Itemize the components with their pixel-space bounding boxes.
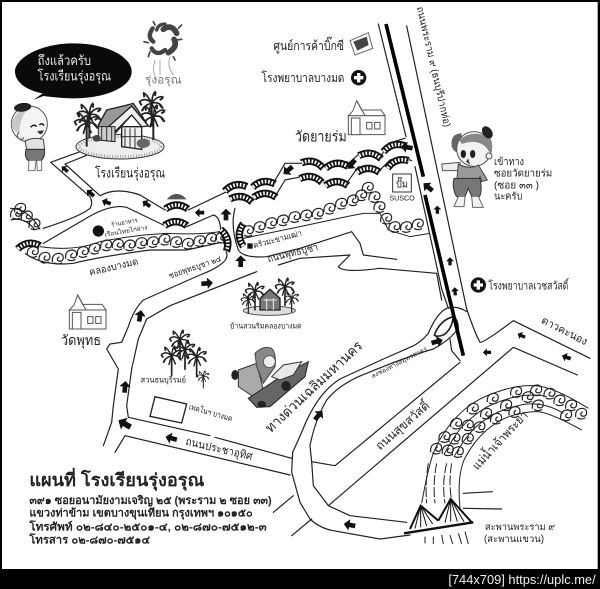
speech bubble: ถึงแล้วครับ [38,53,91,68]
label: Wetchawat hospital: โรงพยาบาลเวชสวัสดิ์ [488,277,570,292]
logo: Rung Aroon sun: รุ่งอรุณ [145,74,182,86]
car illustration [231,347,308,408]
temple: Wat Phut [69,295,106,329]
label: Rama 9 bridge: (สะพานแขวน) [484,534,544,545]
label: Chaloem Maha Nakhon expressway: ทางด่วนเฉลิมมหานคร [262,337,366,436]
label: school name: โรงเรียนรุ่งอรุณ [95,165,165,181]
callout: enter Soi Wat Yai Rom: เข้าทาง [494,156,524,168]
address block [28,494,272,546]
callout: enter Soi Wat Yai Rom: ซอยวัดยายร่ม [494,169,552,180]
highway: Rama 9 road [378,24,467,356]
Chao Phraya river [422,385,588,544]
road network [43,138,590,539]
restaurant marker and label: เรือนไทยไก่ย่าง [104,223,148,239]
label: Big C: ศูนย์การค้าบิ๊กซี [273,36,344,54]
label: to Samut Sakhon: ลงช่องทางสมุทรสาคร [370,346,429,380]
label: Bang Mot hospital: โรงพยาบาลบางมด [262,70,344,85]
bridges [17,142,409,251]
title: map of Rung Aroon School: แผนที่ โรงเรียนรุ่งอรุณ [29,467,204,491]
image-host footer caption: [744x709] https://uplc.me/ [448,573,596,587]
KMUTT Bang Mot campus: เทคโนฯ บางมด [188,401,234,423]
label: Bang Mot canal: คลองบางมด [88,257,139,279]
callout: enter Soi Wat Yai Rom: นะครับ [494,191,522,202]
Rama 9 bridge [404,499,473,533]
label: Rama 9 bridge [484,522,555,545]
expressway loop [467,309,590,358]
label: Suk Sawat road: ถนนสุขสวัสดิ์ [371,396,434,454]
label: Big C [273,33,373,55]
label: Soi Phutthabucha 24: ซอยพุทธบูชา ๒๔ [167,253,223,282]
label: Pracha Uthit road: ถนนประชาอุทิศ [184,436,254,463]
address block: โทรสาร ๐๒-๘๗๐-๗๕๑๔ [28,532,151,546]
character: boy with topknot [11,102,47,171]
SUSCO gas station: ปั๊ม [396,176,408,190]
garden house: riverside homes [241,278,299,315]
school building on island [74,91,165,159]
restaurant marker: Khrua Makham Thao: ครัวมะขามเฒ่า [252,228,303,250]
label: Phutthabucha road: ถนนพุทธบูชา [266,242,319,265]
arrows [59,141,572,532]
label: Chao Phraya river: แม่น้ำเจ้าพระยา [468,407,531,473]
label: Thonburirom park: สวนธนบุรีรมย์ [141,374,186,384]
Thonburirom park palms [161,330,209,388]
speech bubble [15,43,132,100]
label: Wetchawat hospital [471,277,570,293]
label: Rama 9 road: ถนนพระราม ๙ (ธนบุรีปากท่อ) [414,5,453,128]
SUSCO gas station: SUSCO [389,194,415,203]
temple: Wat Yai Rom [348,101,385,135]
SUSCO gas station [389,174,415,203]
address block: โทรศัพท์ ๐๒-๘๔๐-๒๕๐๑-๔, ๐๒-๘๗๐-๗๕๑๒-๓ [28,520,267,534]
callout: enter Soi Wat Yai Rom [494,156,552,202]
speech bubble: โรงเรียนรุ่งอรุณ [38,69,111,85]
address block: ๓๙๑ ซอยอนามัยงามเจริญ ๒๕ (พระราม ๒ ซอย ๓๓) [29,494,272,507]
KMUTT Bang Mot campus [150,397,234,423]
callout: enter Soi Wat Yai Rom: (ซอย ๓๓ ) [494,180,539,191]
character: boy pointing [442,124,495,207]
restaurant marker and label [93,217,148,239]
label: riverside homes: บ้านสวนริมคลองบางมด [230,321,302,330]
logo: Rung Aroon sun [144,22,182,86]
label: Wat Phut: วัดพุทธ [61,332,101,349]
wave canal band: lower [10,203,227,264]
wave canal band: upper [242,182,430,238]
label: Dao Khanong: ดาวคะนอง [539,315,589,348]
restaurant marker and label: ร้านอาหาร [111,217,139,229]
label: Wat Yai Rom: วัดยายร่ม [295,130,347,146]
address block: แขวงท่าข้าม เขตบางขุนเทียน กรุงเทพฯ ๑๐๑๕๐ [29,507,253,521]
label: Rama 9 bridge: สะพานพระราม ๙ [485,522,555,533]
